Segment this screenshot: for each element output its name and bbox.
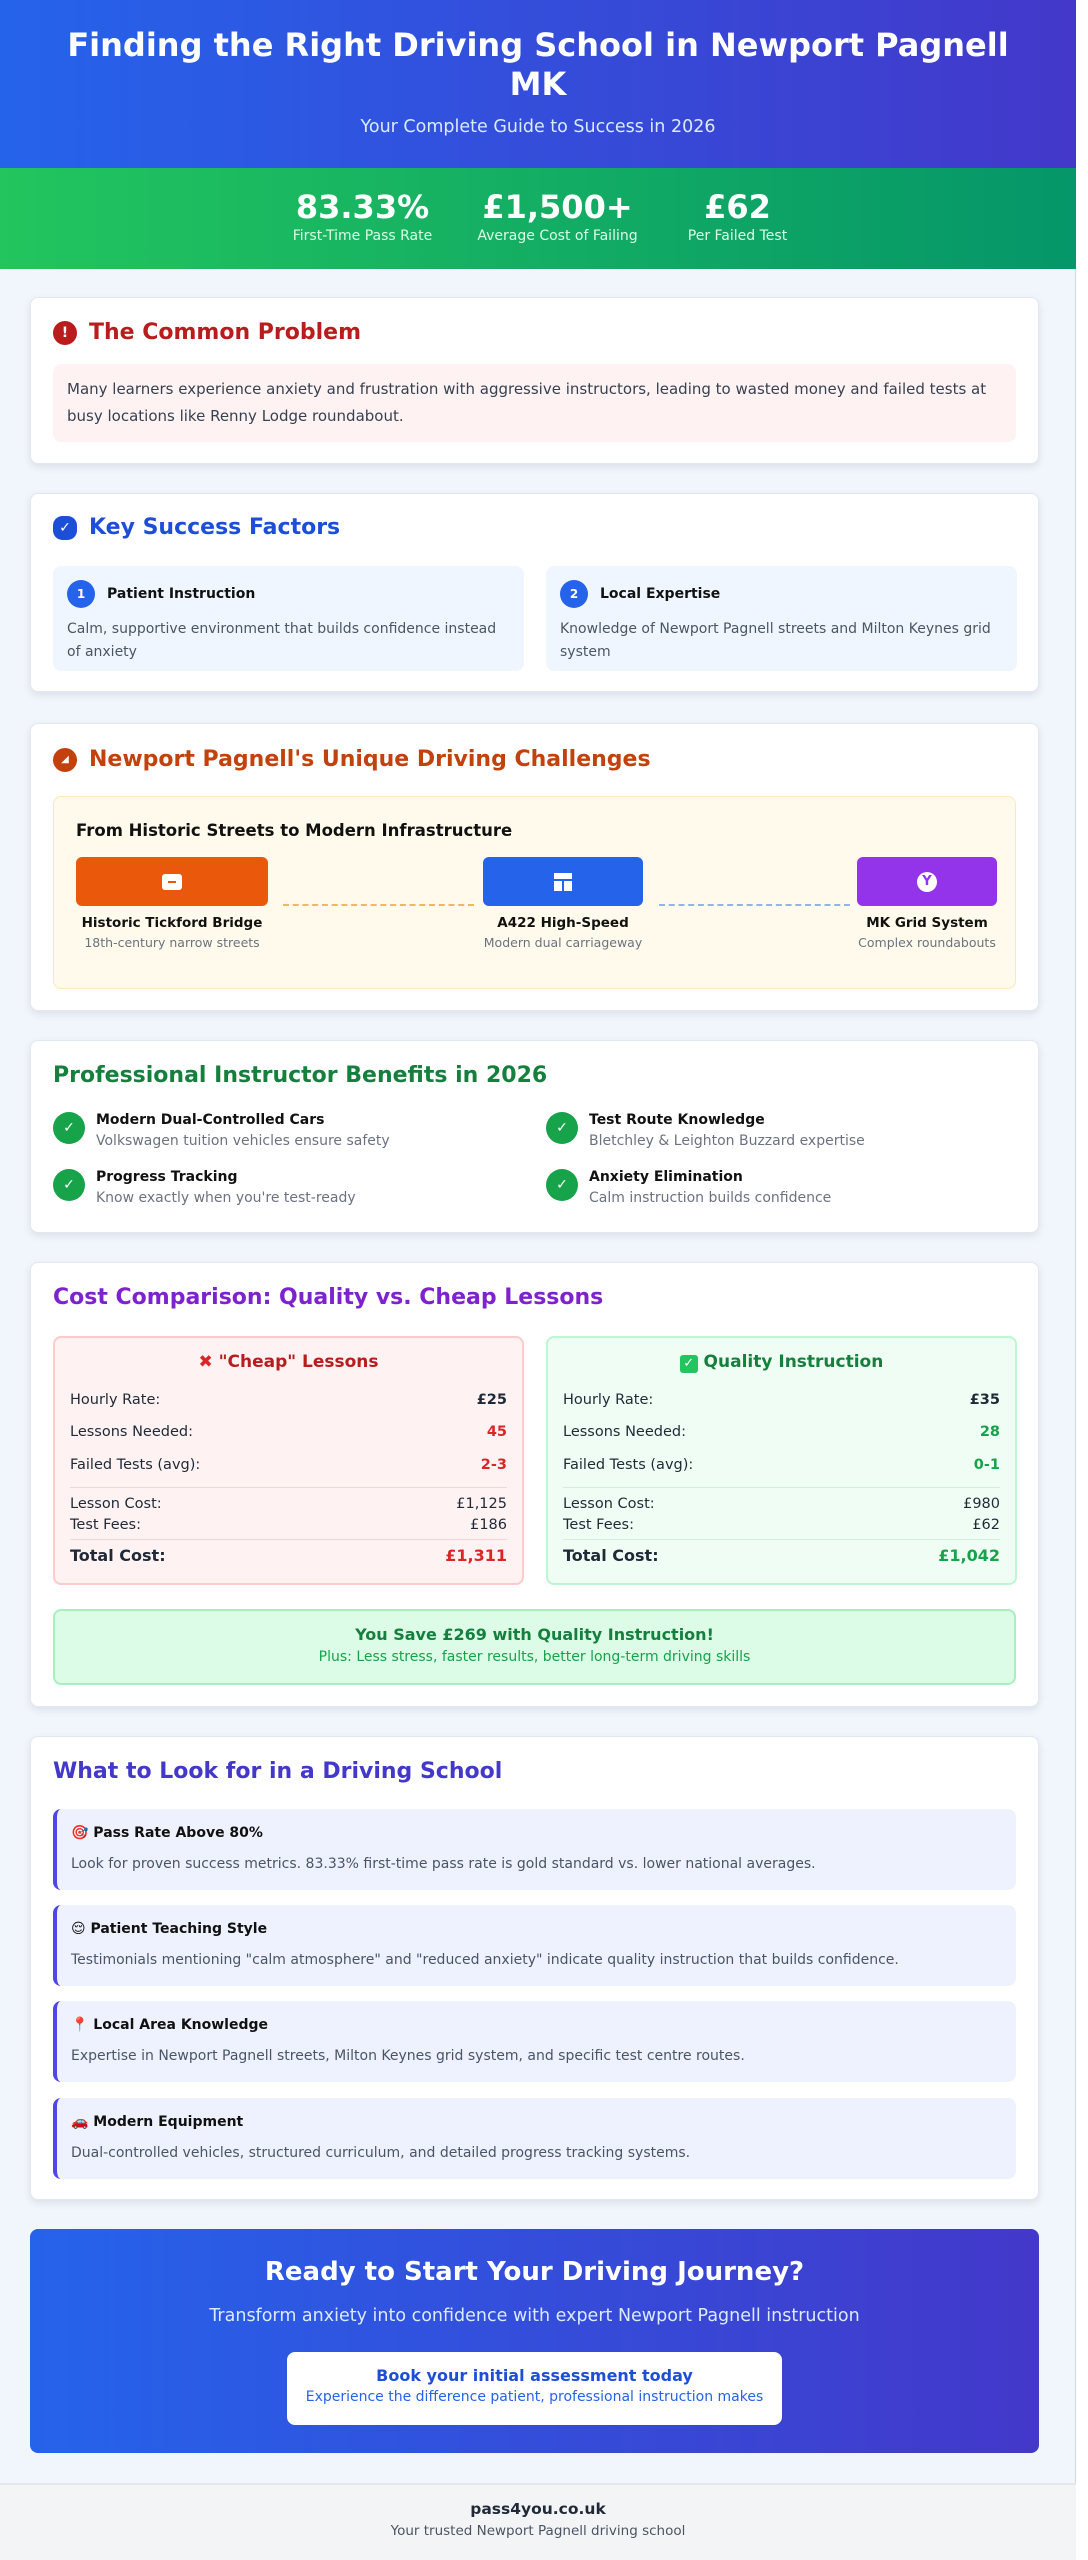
quality instruction box: Quality Instruction [704, 1352, 883, 1372]
heading: challenges: Newport Pagnell's Unique Driving Challenges [89, 747, 651, 772]
cheap lessons box: 2-3 [481, 1457, 507, 1473]
stat: per failed test [688, 188, 787, 244]
cheap lessons box [53, 1336, 524, 1585]
benefit: test route: Test Route Knowledge [589, 1112, 765, 1128]
cheap lessons box: £25 [477, 1392, 507, 1408]
quality instruction box: Lessons Needed: [563, 1424, 686, 1440]
title [67, 26, 1009, 103]
call to action [30, 2229, 1039, 2453]
factor 1: Patient Instruction [107, 586, 255, 602]
stat: pass rate: 83.33% [296, 188, 429, 226]
cta subtext: Transform anxiety into confidence with expert Newport Pagnell instruction [209, 2306, 860, 2326]
benefit: anxiety elimination [546, 1169, 831, 1206]
quality instruction box: £980 [963, 1496, 1000, 1512]
cheap lessons box: ✖ "Cheap" Lessons [198, 1352, 379, 1372]
stop: A422 [483, 857, 643, 950]
cheap lessons box: Hourly Rate: [70, 1392, 160, 1408]
title: Finding the Right Driving School in Newport Pagnell [67, 26, 1009, 64]
text block: problem [53, 364, 1016, 442]
factor 2: 2 [570, 587, 578, 601]
cheap lessons box: £1,311 [445, 1546, 507, 1565]
cheap lessons box: £186 [470, 1517, 507, 1533]
quality instruction box: £62 [972, 1517, 1000, 1533]
quality instruction box: Hourly Rate: [563, 1392, 653, 1408]
footer: pass4you.co.uk [470, 2500, 606, 2518]
stop: Tickford Bridge: Historic Tickford Bridge [82, 915, 262, 931]
cheap lessons box: Lessons Needed: [70, 1424, 193, 1440]
stat: cost of failing [477, 188, 638, 244]
stop: MK Grid: Complex roundabouts [858, 935, 996, 950]
benefit: anxiety elimination: ✓ [556, 1177, 568, 1193]
cta button: Book your initial assessment today [376, 2366, 693, 2385]
item: local knowledge: Expertise in Newport Pagnell streets, Milton Keynes grid system, and specific test centre routes. [71, 2048, 745, 2064]
benefit: dual controlled: ✓ [63, 1120, 75, 1136]
footer: Your trusted Newport Pagnell driving school [391, 2523, 685, 2539]
text block: problem: Many learners experience anxiety and frustration with aggressive instructors, leading to wasted money and failed tests at busy locations like Renny Lodge roundabout. [67, 380, 986, 425]
heading: common problem: ! [62, 324, 68, 340]
savings callout [53, 1609, 1016, 1685]
benefit: progress tracking: Know exactly when you're test-ready [96, 1190, 356, 1206]
item: pass rate [53, 1809, 1016, 1890]
stop: A422: Modern dual carriageway [484, 935, 642, 950]
benefit: progress tracking: Progress Tracking [96, 1169, 238, 1185]
benefit: progress tracking [53, 1169, 356, 1206]
cheap lessons box: Total Cost: [70, 1546, 166, 1565]
item: pass rate: 🎯 Pass Rate Above 80% [71, 1825, 263, 1841]
factor 2: Knowledge of Newport Pagnell streets and Milton Keynes grid system [560, 621, 991, 660]
panel: common problem [30, 297, 1039, 464]
stop: Tickford Bridge [76, 857, 268, 950]
benefit: test route: ✓ [556, 1120, 568, 1136]
header [0, 0, 1076, 168]
item: pass rate: Look for proven success metrics. 83.33% first-time pass rate is gold standard vs. lower national averages. [71, 1856, 816, 1872]
benefit: dual controlled: Modern Dual-Controlled Cars [96, 1112, 324, 1128]
stats band [0, 168, 1076, 269]
factor 2: Local Expertise [600, 586, 720, 602]
arrow dashes 1 [283, 904, 474, 906]
factor 1: 1 [77, 587, 85, 601]
quality instruction box [546, 1336, 1017, 1585]
stop: Tickford Bridge: 18th-century narrow streets [84, 935, 260, 950]
benefit: test route [546, 1112, 865, 1149]
stop: MK Grid: MK Grid System [866, 915, 988, 931]
timeline box [53, 796, 1016, 989]
quality instruction box: £35 [970, 1392, 1000, 1408]
panel: instructor benefits [30, 1040, 1039, 1233]
factor 2 [546, 566, 1017, 671]
stop: MK Grid [857, 857, 997, 950]
cheap lessons box: Lesson Cost: [70, 1496, 162, 1512]
cta button [287, 2352, 782, 2425]
item: teaching style [53, 1905, 1016, 1986]
item: teaching style: 😌 Patient Teaching Style [71, 1921, 267, 1937]
panel: unique driving challenges [30, 723, 1039, 1011]
item: equipment [53, 2098, 1016, 2179]
heading: challenges: ◢ [61, 754, 69, 765]
benefit: anxiety elimination: Anxiety Elimination [589, 1169, 743, 1185]
benefit: dual controlled [53, 1112, 390, 1149]
item: equipment: Dual-controlled vehicles, structured curriculum, and detailed progress tracking systems. [71, 2145, 690, 2161]
cta button: Experience the difference patient, professional instruction makes [306, 2389, 763, 2405]
benefit: anxiety elimination: Calm instruction builds confidence [589, 1190, 831, 1206]
panel: cost comparison [30, 1262, 1039, 1707]
panel: what to look for [30, 1736, 1039, 2200]
quality instruction box: Test Fees: [563, 1517, 634, 1533]
savings callout: You Save £269 with Quality Instruction! [355, 1625, 714, 1644]
arrow dashes 2 [659, 904, 850, 906]
heading: common problem: The Common Problem [89, 320, 361, 345]
benefit: test route: Bletchley & Leighton Buzzard expertise [589, 1133, 865, 1149]
subtitle: Your Complete Guide to Success in 2026 [361, 117, 715, 137]
subheading: From Historic Streets to Modern Infrastructure [76, 821, 512, 840]
stat: cost of failing: £1,500+ [482, 188, 633, 226]
quality instruction box: 28 [980, 1424, 1000, 1440]
stat: pass rate: First-Time Pass Rate [293, 228, 432, 244]
item: local knowledge [53, 2001, 1016, 2082]
stat: pass rate [293, 188, 432, 244]
benefit: dual controlled: Volkswagen tuition vehicles ensure safety [96, 1133, 390, 1149]
item: teaching style: Testimonials mentioning "calm atmosphere" and "reduced anxiety" indicate quality instruction that builds confidence. [71, 1952, 899, 1968]
panel: key success factors [30, 493, 1039, 692]
quality instruction box: £1,042 [938, 1546, 1000, 1565]
heading: key success factors: ✓ [59, 520, 71, 536]
item: local knowledge: 📍 Local Area Knowledge [71, 2017, 268, 2033]
heading: what to look for: What to Look for in a Driving School [53, 1759, 502, 1784]
heading: key success factors: Key Success Factors [89, 515, 340, 540]
cheap lessons box: £1,125 [456, 1496, 507, 1512]
savings callout: Plus: Less stress, faster results, better long-term driving skills [319, 1649, 750, 1665]
stat: per failed test: Per Failed Test [688, 228, 787, 244]
cta heading: Ready to Start Your Driving Journey? [265, 2257, 804, 2287]
cheap lessons box: 45 [487, 1424, 507, 1440]
cheap lessons box: Failed Tests (avg): [70, 1457, 200, 1473]
cheap lessons box: Test Fees: [70, 1517, 141, 1533]
quality instruction box: ✓ [683, 1356, 694, 1371]
benefit: progress tracking: ✓ [63, 1177, 75, 1193]
stat: cost of failing: Average Cost of Failing [477, 228, 638, 244]
factor 1 [53, 566, 524, 671]
heading: cost comparison: Cost Comparison: Quality vs. Cheap Lessons [53, 1285, 603, 1310]
factor 1: Calm, supportive environment that builds confidence instead of anxiety [67, 621, 496, 660]
quality instruction box: 0-1 [974, 1457, 1000, 1473]
quality instruction box: Total Cost: [563, 1546, 659, 1565]
quality instruction box: Failed Tests (avg): [563, 1457, 693, 1473]
quality instruction box: Lesson Cost: [563, 1496, 655, 1512]
stop: A422: A422 High-Speed [497, 915, 629, 931]
heading: benefits: Professional Instructor Benefits in 2026 [53, 1063, 547, 1088]
stat: per failed test: £62 [704, 188, 771, 226]
title: MK [510, 65, 566, 103]
stop: MK Grid: Y [922, 874, 932, 889]
item: equipment: 🚗 Modern Equipment [71, 2114, 243, 2130]
footer [0, 2483, 1076, 2560]
